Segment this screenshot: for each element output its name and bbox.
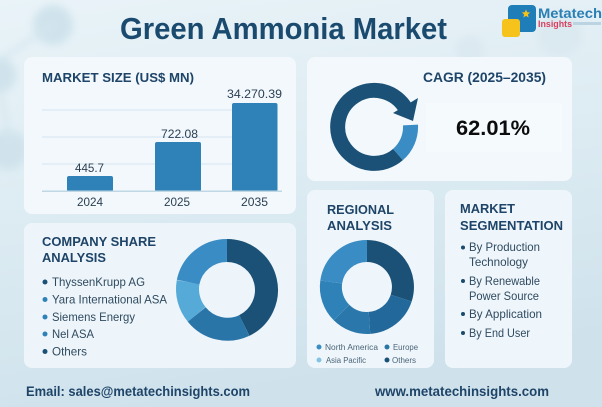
panel: market segmentation	[445, 190, 572, 368]
legend: regions	[316, 343, 419, 365]
panel: CAGR	[307, 57, 572, 181]
title: Green Ammonia Market	[120, 11, 447, 46]
CAGR value: 62.01%	[456, 117, 530, 140]
CAGR value	[426, 103, 562, 152]
bar chart: 2035	[241, 195, 268, 209]
legend: regions: Asia Pacific	[326, 356, 366, 365]
panel: market size	[24, 57, 296, 214]
bar chart: 2024	[77, 195, 103, 209]
legend: companies: Others	[52, 344, 87, 358]
bar chart: 2025	[164, 195, 190, 209]
bar chart: 722.08	[161, 127, 198, 141]
donut chart: regional	[331, 251, 403, 323]
heading: market size: MARKET SIZE (US$ MN)	[42, 70, 194, 85]
panel: company share	[24, 223, 296, 368]
heading: regional analysis: ANALYSIS	[327, 218, 392, 233]
donut chart: company share	[187, 250, 266, 329]
list: segments: By Application	[469, 307, 542, 321]
legend: companies: ThyssenKrupp AG	[52, 275, 145, 289]
footer: website: www.metatechinsights.com	[374, 383, 549, 399]
legend: companies: Yara International ASA	[52, 292, 167, 306]
legend: regions: North America	[325, 343, 379, 352]
list: segments: By End User	[469, 326, 530, 340]
legend: regions: Europe	[393, 343, 419, 352]
icon: circular arrow	[338, 90, 418, 163]
heading: CAGR: CAGR (2025–2035)	[423, 70, 546, 85]
heading: regional analysis: REGIONAL	[327, 202, 394, 217]
list: segments: By Renewable	[469, 274, 540, 288]
heading: market segmentation: SEGMENTATION	[460, 218, 563, 233]
bar chart	[42, 87, 282, 209]
heading: company share	[42, 234, 156, 265]
legend: regions: Others	[392, 356, 416, 365]
heading: company share: ANALYSIS	[42, 250, 106, 265]
heading: company share: COMPANY SHARE	[42, 234, 156, 249]
bar chart: 445.7	[75, 161, 104, 175]
bar chart: 34.270.39	[227, 87, 282, 101]
footer: email: Email: sales@metatechinsights.com	[26, 383, 250, 399]
heading: market segmentation: MARKET	[460, 201, 515, 216]
list: segments	[461, 240, 542, 340]
list: segments: Technology	[469, 255, 528, 269]
list: segments: Power Source	[469, 289, 539, 303]
logo: Metatech Insights	[502, 5, 602, 37]
logo: Metatech Insights: Metatech	[538, 6, 602, 21]
panel: regional analysis	[307, 190, 434, 368]
list: segments: By Production	[469, 240, 540, 254]
logo: Metatech Insights: Insights	[538, 19, 572, 30]
legend: companies: Siemens Energy	[52, 310, 135, 324]
legend: companies	[42, 275, 167, 358]
heading: market segmentation	[460, 201, 563, 233]
legend: companies: Nel ASA	[52, 327, 94, 341]
heading: regional analysis	[327, 202, 394, 233]
